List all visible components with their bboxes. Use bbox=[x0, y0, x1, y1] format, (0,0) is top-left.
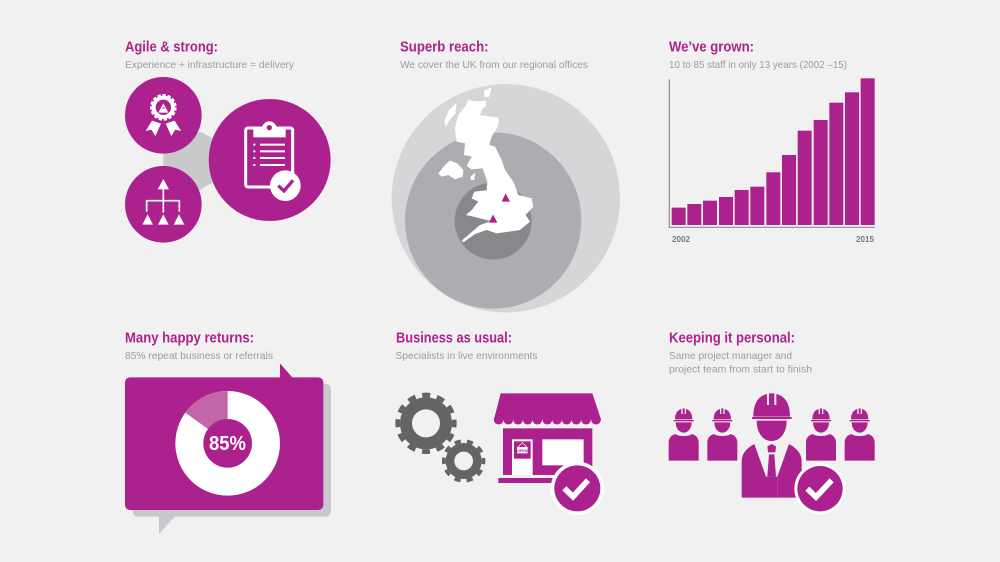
icon: shop bbox=[494, 393, 601, 483]
icon: office marker bbox=[489, 214, 497, 223]
icon: check badge bbox=[551, 462, 604, 515]
axis label: 2015: 2015 bbox=[856, 234, 874, 244]
icon: shop: OPEN bbox=[517, 449, 528, 453]
text: experience plus infrastructure: Experience + infrastructure = delivery bbox=[125, 59, 295, 71]
text: staff growth: 10 to 85 staff in only 13 years (2002 –15) bbox=[669, 59, 847, 71]
text: start to finish: project team from start to finish bbox=[669, 364, 812, 376]
icon: office marker bbox=[502, 193, 510, 202]
heading: we have grown: We’ve grown: bbox=[669, 38, 754, 56]
heading: superb reach: Superb reach: bbox=[400, 38, 488, 56]
text: repeat business: 85% repeat business or referrals bbox=[125, 350, 273, 362]
text: regional offices: We cover the UK from our regional offices bbox=[400, 59, 588, 71]
illustration: project team bbox=[669, 393, 875, 514]
icon: team member bbox=[707, 408, 737, 461]
diagram: coverage circles with UK map bbox=[392, 84, 620, 312]
donut chart: 85 percent bbox=[175, 391, 280, 496]
icon: check badge bbox=[794, 463, 846, 514]
icon: organisation chart bbox=[142, 179, 184, 225]
illustration: gears and shop bbox=[398, 393, 604, 515]
text: specialists: Specialists in live environments bbox=[396, 350, 538, 362]
icon: clipboard with check bbox=[246, 121, 301, 201]
panel: we have grown bbox=[669, 38, 875, 244]
icon: team member bbox=[845, 408, 875, 461]
heading: business as usual: Business as usual: bbox=[396, 330, 512, 346]
icon: team member bbox=[669, 408, 699, 461]
icon: award rosette bbox=[146, 95, 181, 136]
speech bubbles with donut bbox=[125, 363, 331, 534]
bar chart: staff 2002 to 2015 bbox=[669, 78, 875, 227]
map: United Kingdom bbox=[438, 87, 533, 242]
panel: keeping it personal bbox=[669, 330, 875, 514]
icon: team member bbox=[806, 408, 836, 461]
icon: project manager bbox=[742, 393, 802, 498]
heading: many happy returns: Many happy returns: bbox=[125, 330, 254, 346]
axis label: 2002: 2002 bbox=[672, 234, 690, 244]
donut value: 85% bbox=[209, 433, 246, 455]
icon: large gear bbox=[398, 395, 454, 452]
heading: keeping it personal: Keeping it personal: bbox=[669, 330, 795, 346]
icon: small gear bbox=[444, 441, 483, 481]
panel: many happy returns bbox=[125, 330, 331, 534]
diagram: three linked circles bbox=[125, 77, 331, 243]
panel: superb reach bbox=[392, 38, 620, 312]
heading: agile and strong: Agile & strong: bbox=[125, 38, 218, 56]
panel: business as usual bbox=[396, 330, 604, 515]
text: same project team: Same project manager and bbox=[669, 350, 792, 362]
panel: agile and strong bbox=[125, 38, 331, 243]
